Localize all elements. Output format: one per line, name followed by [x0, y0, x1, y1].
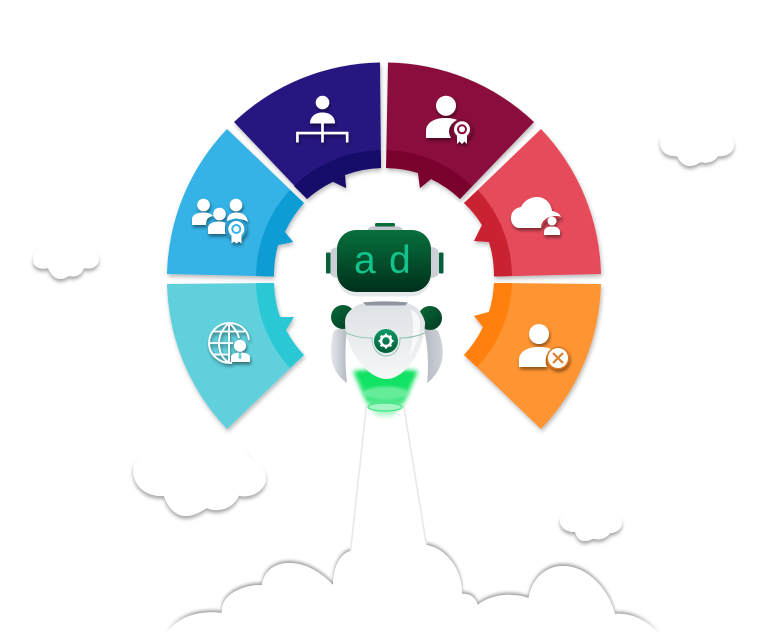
- visor: [337, 230, 431, 292]
- head top cap: [367, 223, 403, 231]
- neck: [363, 301, 408, 306]
- segment: purple: [234, 62, 381, 199]
- icon: team with medal: [192, 199, 248, 244]
- icon: person with cross: [519, 324, 570, 370]
- cloud: lower left: [133, 438, 266, 516]
- logo letters: a: [354, 239, 376, 282]
- robot: [326, 223, 444, 417]
- segment: orange: [464, 283, 601, 429]
- icon: org chart person: [296, 96, 349, 142]
- logo letters: [354, 239, 411, 282]
- cloud: left small: [33, 242, 99, 279]
- icon: globe with person: [209, 323, 250, 363]
- cloud: top right: [660, 126, 734, 166]
- left arm: [331, 329, 347, 383]
- rocket trail: [349, 405, 428, 575]
- icon: person with medal: [426, 96, 472, 144]
- torso highlight: [408, 309, 420, 358]
- left ear: [326, 247, 339, 278]
- segment: teal: [167, 283, 304, 429]
- torso: [345, 303, 425, 379]
- cloud: lower right small: [560, 507, 622, 541]
- icon: cloud user: [511, 197, 561, 235]
- left shoulder: [331, 305, 355, 329]
- right arm: [424, 328, 443, 383]
- segment: blue: [167, 129, 304, 276]
- cloud base fade: [150, 612, 680, 640]
- big cloud base: [160, 545, 664, 640]
- logo letters: d: [389, 239, 411, 282]
- flame: [353, 370, 418, 417]
- gear badge: [372, 328, 400, 354]
- segment: maroon: [386, 62, 534, 199]
- segment: red: [464, 129, 601, 276]
- belly seam: [345, 332, 425, 356]
- right ear: [430, 247, 444, 278]
- right shoulder: [418, 306, 442, 330]
- head rim: [337, 234, 431, 296]
